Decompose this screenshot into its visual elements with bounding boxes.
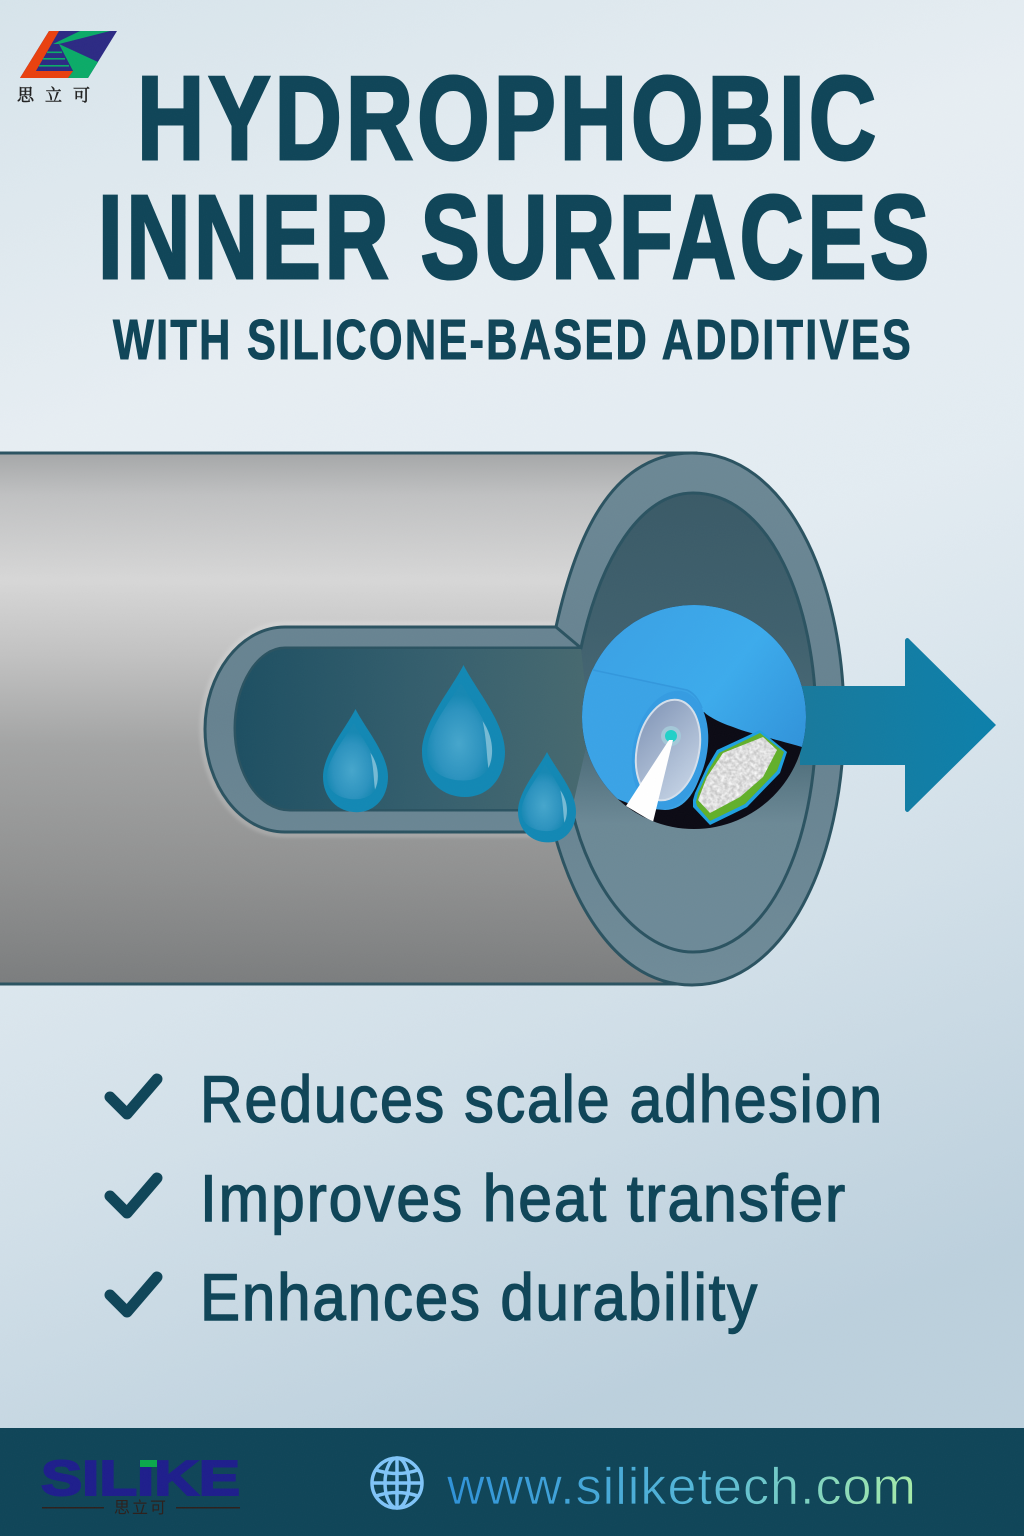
benefit text: Reduces scale adhesion — [200, 1062, 884, 1136]
water drop: large centre — [422, 665, 505, 797]
pipe end ring and slot outer wall — [205, 453, 844, 985]
check item 1 — [110, 1062, 884, 1136]
pipe body — [0, 453, 696, 984]
website url: www.siliketech.com — [446, 1458, 917, 1516]
pellet packet — [693, 730, 787, 825]
blue pipe elbow — [584, 605, 806, 747]
checklist — [110, 1062, 884, 1334]
title — [98, 52, 933, 304]
slot interior shading — [236, 649, 590, 809]
slot halo on pipe surface — [202, 624, 556, 835]
logo chinese name: 思 立 可 — [17, 81, 90, 106]
arrow — [800, 638, 996, 812]
ring notch top — [553, 627, 581, 832]
icon: check mark — [110, 1277, 157, 1312]
bore glow — [661, 726, 681, 746]
water drop: small left — [323, 709, 388, 812]
blue pipe branch — [582, 669, 700, 810]
white light beam — [626, 740, 673, 822]
icon: check mark — [110, 1178, 157, 1213]
branch top crease — [593, 670, 702, 708]
benefit text: Enhances durability — [200, 1260, 759, 1334]
icon: globe — [372, 1458, 422, 1508]
pipe bore — [634, 698, 702, 802]
icon: check mark — [110, 1079, 157, 1114]
benefit text: Improves heat transfer — [200, 1161, 847, 1235]
footer bar — [0, 1428, 1024, 1536]
silike brand logo: SILIKE — [41, 1452, 240, 1506]
circular inset: blue pipe with pellets — [575, 600, 815, 831]
check item 3 — [110, 1260, 759, 1334]
pipe mouth rim — [698, 704, 708, 780]
silike brand logo — [41, 1452, 240, 1517]
check item 2 — [110, 1161, 847, 1235]
silike brand logo: 思立可 — [114, 1499, 166, 1517]
water drop: small right — [518, 752, 576, 842]
icon: company logo mark — [17, 31, 117, 106]
pipe inner cavity — [235, 493, 816, 952]
pipe illustration — [0, 453, 844, 985]
